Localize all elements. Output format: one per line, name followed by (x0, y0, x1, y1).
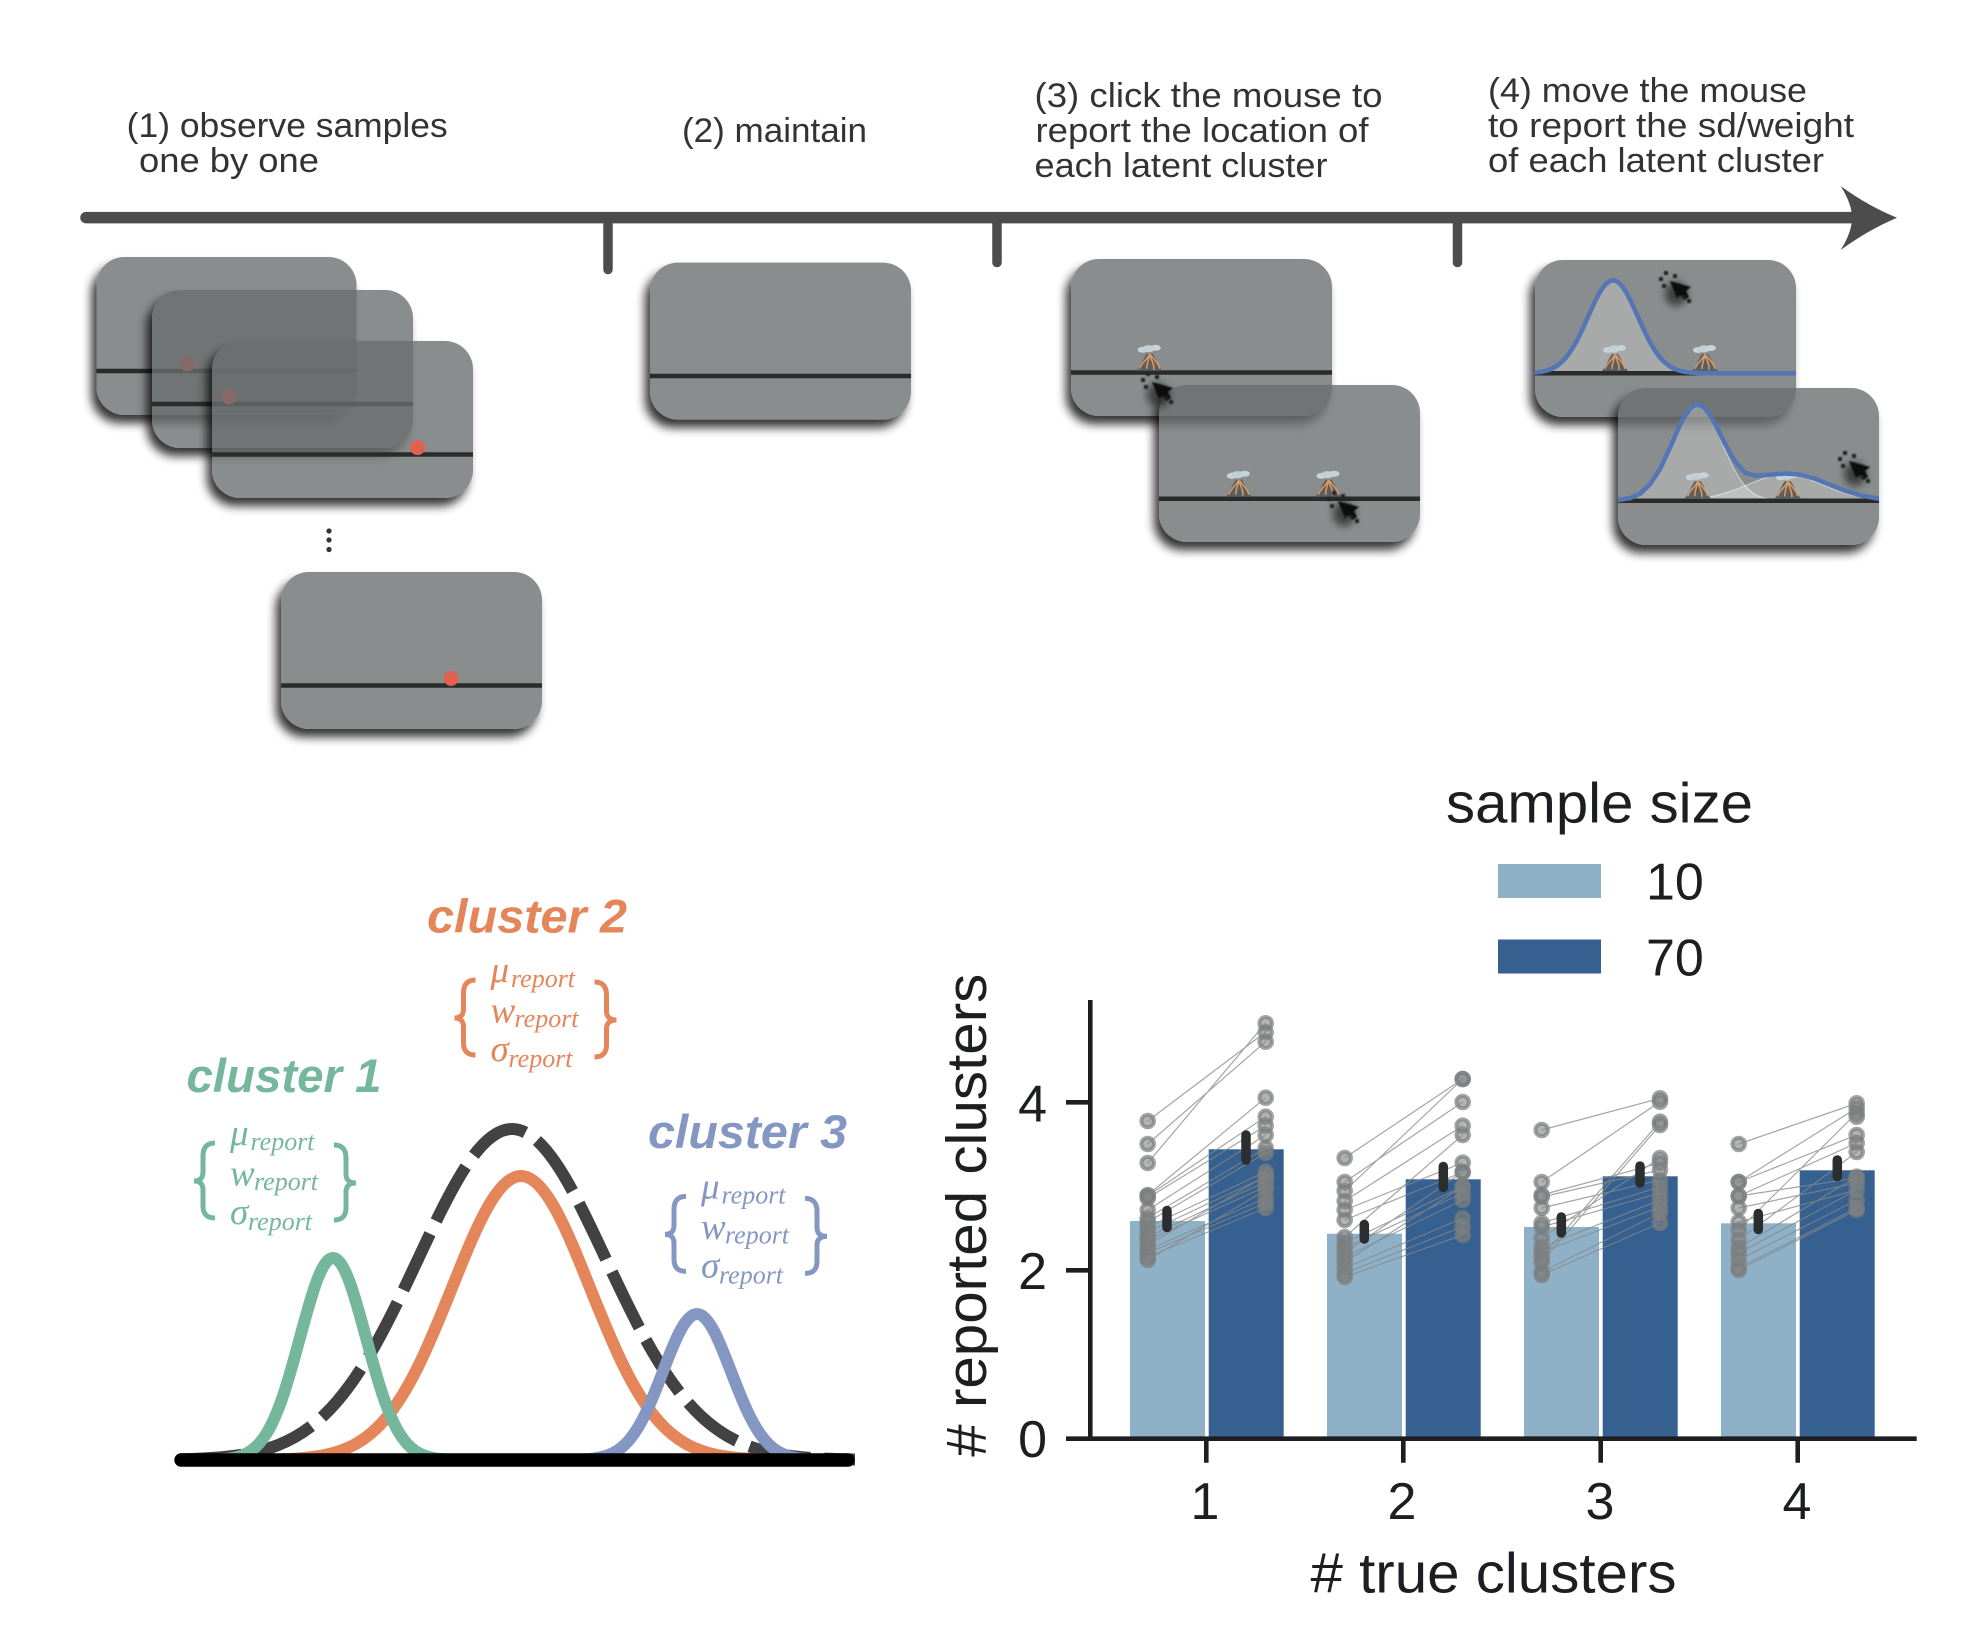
label: step 3 click the mouse (1034, 77, 1382, 185)
x tick labels: 3 (1586, 1473, 1614, 1531)
curve: cluster 2 orange (210, 1176, 832, 1460)
parameters: cluster 1: w (230, 1154, 255, 1194)
parameters: cluster 3 (665, 1166, 827, 1289)
parameters: cluster 2: μ (490, 950, 509, 991)
x tick labels (1191, 1473, 1811, 1531)
ellipsis dots (326, 528, 332, 552)
parameters: cluster 1: report (250, 1127, 315, 1156)
parameters: cluster 3: w (701, 1207, 726, 1248)
parameters: cluster 3: report (719, 1260, 784, 1289)
bars: sample size 10 (1130, 1221, 1796, 1437)
y tick labels: 0 (1018, 1411, 1047, 1469)
label: step 3 click the mouse: each latent cluster (1034, 147, 1328, 185)
baseline (181, 1453, 848, 1467)
heading: cluster 3: cluster 3 (648, 1105, 847, 1158)
x tick labels: 2 (1388, 1473, 1416, 1531)
error bars (1167, 1135, 1837, 1239)
x tick labels: 1 (1191, 1473, 1219, 1531)
parameters: cluster 1 (194, 1113, 356, 1236)
screen: last sample (281, 572, 542, 729)
screen: maintain (650, 263, 911, 420)
participant dots (1141, 1017, 1863, 1283)
curve: cluster 3 blue (544, 1314, 850, 1460)
label: step 1 observe samples: (1) observe samples (127, 107, 448, 145)
heading: cluster 2: cluster 2 (427, 890, 627, 942)
label: step 1 observe samples (127, 107, 448, 180)
screen: first sample (96, 257, 356, 415)
legend: sample size: 70 (1646, 930, 1704, 988)
parameters: cluster 3: μ (701, 1166, 720, 1207)
bars: sample size 70 (1209, 1149, 1875, 1437)
parameters: cluster 2 (454, 950, 616, 1073)
label: step 4 move the mouse: to report the sd/weight (1488, 107, 1855, 145)
x axis title: # true clusters (1310, 1542, 1676, 1606)
legend: sample size: 10 (1646, 854, 1704, 912)
parameters: cluster 3: report (722, 1180, 786, 1209)
label: step 2 maintain: (2) maintain (682, 112, 867, 150)
y tick labels: 4 (1018, 1076, 1047, 1134)
parameters: cluster 2: report (514, 1004, 579, 1033)
screen: click first cluster (1071, 259, 1332, 416)
label: step 3 click the mouse: (3) click the mouse to (1034, 77, 1382, 115)
mixture density illustration (174, 1123, 855, 1467)
parameters: cluster 2: report (511, 964, 576, 993)
screen: report second cluster sd and weight (1605, 388, 1882, 561)
y axis title: # reported clusters (935, 974, 999, 1457)
curve: cluster 1 green (184, 1258, 482, 1460)
label: step 1 observe samples: one by one (139, 142, 319, 180)
bar chart: reported vs true clusters (935, 974, 1917, 1606)
parameters: cluster 3: report (725, 1220, 790, 1249)
axes and ticks (1066, 1000, 1917, 1463)
parameters: cluster 1: report (254, 1167, 319, 1196)
parameters: cluster 1: μ (230, 1113, 249, 1154)
label: step 4 move the mouse: of each latent cluster (1488, 142, 1824, 180)
parameters: cluster 1: σ (230, 1192, 248, 1233)
label: step 3 click the mouse: report the location of (1036, 112, 1369, 150)
parameters: cluster 2: σ (490, 1029, 509, 1070)
parameters: cluster 3: σ (701, 1245, 719, 1286)
timeline arrow with ticks (86, 186, 1897, 270)
parameters: cluster 2: report (508, 1044, 573, 1073)
label: step 4 move the mouse: (4) move the mouse (1488, 72, 1807, 110)
parameters: cluster 1: report (248, 1207, 313, 1236)
label: step 4 move the mouse (1488, 72, 1855, 180)
screen: click second cluster (1159, 385, 1420, 542)
paired participant lines (1148, 1023, 1857, 1277)
screen: second sample (152, 290, 413, 448)
screen: report first cluster sd and weight (1500, 260, 1796, 417)
legend: sample size (1446, 772, 1753, 988)
parameters: cluster 2: w (490, 990, 515, 1032)
curve: dashed mixture (180, 1123, 855, 1466)
x tick labels: 4 (1783, 1473, 1811, 1531)
icon: cursor on first click screen (1141, 372, 1173, 407)
y tick labels: 2 (1018, 1243, 1047, 1301)
heading: cluster 1: cluster 1 (186, 1049, 382, 1102)
legend: sample size: sample size (1446, 772, 1753, 836)
screen: third sample (212, 341, 473, 498)
y tick labels (1018, 1076, 1047, 1469)
